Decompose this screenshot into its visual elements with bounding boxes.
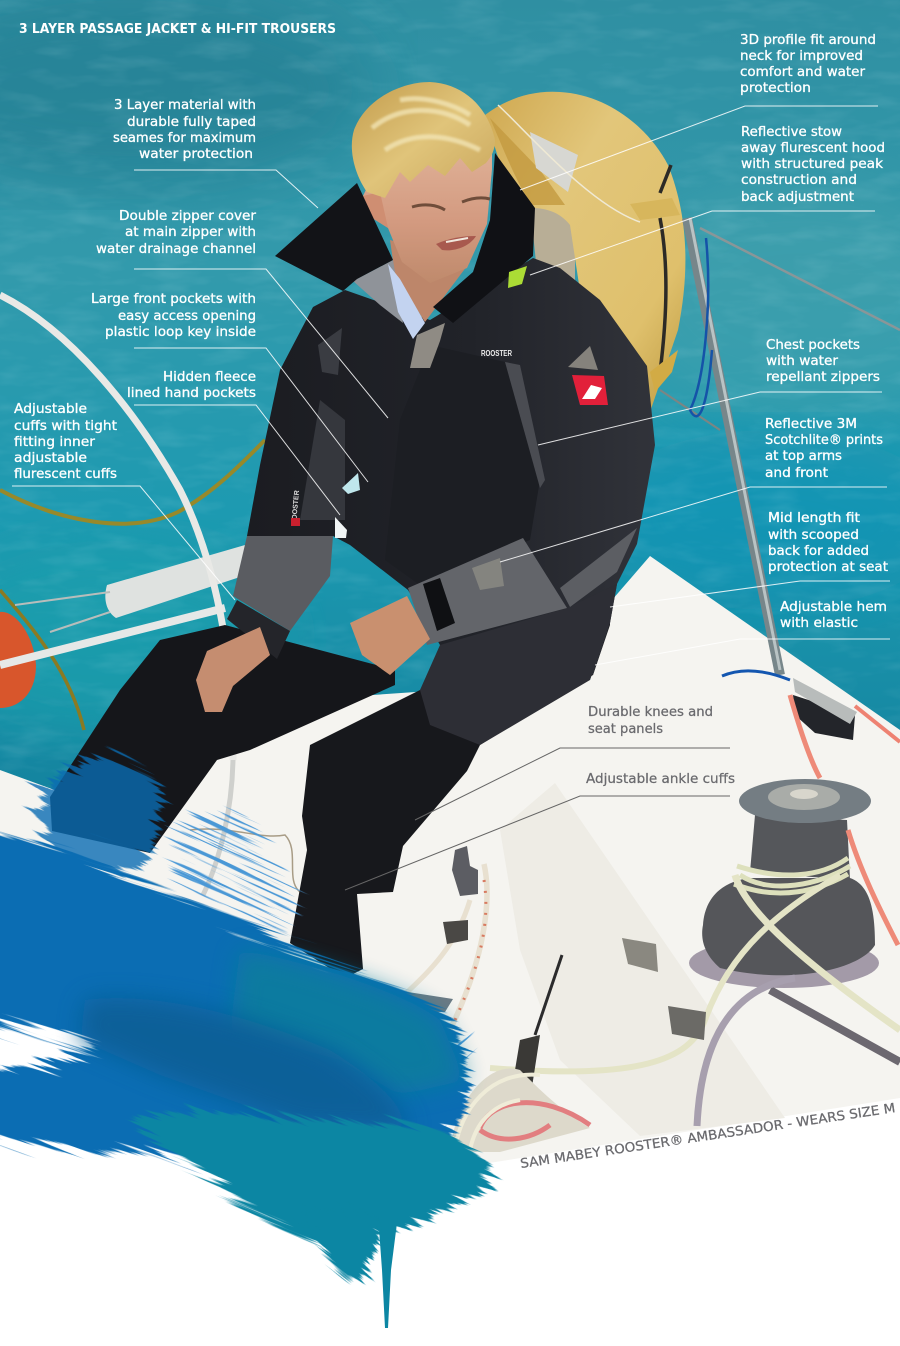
callout: chest pockets: with water [766,354,839,369]
callout: 3D profile fit: 3D profile fit around [740,33,876,48]
left sleeve grey panel [233,536,333,631]
pocket gaps [342,473,360,494]
callout: durable knees [415,705,730,820]
eyes and mouth [412,198,490,210]
callout: adjustable cuffs: adjustable [14,451,87,466]
callout: reflective stow hood: back adjustment [741,190,854,205]
callout: double zipper cover: at main zipper with [125,225,256,240]
person: Sam Mabey in jacket and trousers [50,82,655,978]
thigh and jacket hem panel [420,584,617,745]
blue streaks on right [318,970,544,1195]
face [363,130,492,283]
callout: adjustable cuffs [12,402,235,600]
callout: reflective stow hood: construction and [741,173,857,188]
callout: adjustable hem [595,600,890,665]
left trouser leg [50,625,395,853]
winch [490,695,900,1126]
callout: 3D profile fit: protection [740,81,811,96]
feathered lower streaks [246,1156,434,1344]
callout: reflective 3M prints: and front [765,466,828,481]
teal overlay mid right [230,950,465,1095]
callout: reflective 3M prints: Reflective 3M [765,417,857,432]
title: 3 LAYER PASSAGE JACKET & HI-FIT TROUSERS [19,22,336,37]
brand badge [572,375,608,405]
callout: large front pockets: easy access opening [118,309,256,324]
callout: large front pockets: plastic loop key inside [105,325,256,340]
cuffs [227,600,290,659]
chest logo: ROOSTER [481,349,512,358]
callout: 3D profile fit: neck for improved [740,49,863,64]
sleeve logo: ROOSTER [291,490,301,525]
stanchion and rigging [660,218,900,742]
callout: hidden fleece pockets: Hidden fleece [163,370,256,385]
callout: adjustable cuffs: fitting inner [14,435,96,450]
callout: 3 layer material: durable fully taped [127,115,256,130]
callout: hidden fleece pockets: lined hand pockets [127,386,256,401]
callout: adjustable cuffs: cuffs with tight [14,419,117,434]
deck shading [500,783,785,1136]
callout: mid length fit [610,511,890,607]
callout: 3D profile fit [520,33,878,190]
background: sea water [0,0,900,790]
neck [390,240,470,322]
deck fittings and ropes [360,846,706,1152]
callout: chest pockets [538,338,882,445]
callout: 3D profile fit: comfort and water [740,65,866,80]
callout: durable knees: seat panels [588,722,663,737]
callout: chest pockets: Chest pockets [766,338,860,353]
callout: adjustable hem: with elastic [780,616,858,631]
collar hood left [275,183,393,291]
callout: reflective 3M prints: Scotchlite® prints [765,433,883,448]
callout: adjustable cuffs: Adjustable [14,402,87,417]
caption: ambassador: SAM MABEY ROOSTER® AMBASSADOR - WEARS SIZE M [519,1101,896,1172]
callout: 3 layer material [113,98,318,208]
jacket body [247,258,655,675]
callout: durable knees: Durable knees and [588,705,713,720]
main blue stroke [0,669,563,1296]
light streaks on deck [103,746,357,1004]
callout: double zipper cover [96,209,388,418]
callout: reflective 3M prints [500,417,887,562]
callout: mid length fit: Mid length fit [768,511,860,526]
callout: reflective stow hood: Reflective stow [741,125,842,140]
right sleeve grey panels [408,538,567,645]
reflective patches [410,323,445,368]
callout: adjustable hem: Adjustable hem [780,600,887,615]
callout: reflective stow hood: with structured peak [741,157,883,172]
blue paint splash [0,669,563,1346]
callout: large front pockets: Large front pockets with [91,292,256,307]
callout: mid length fit: back for added [768,544,869,559]
callout: mid length fit: protection at seat [768,560,888,575]
white hoop, rails, rope and buoy at left [0,295,300,895]
callout: reflective stow hood: away flurescent hood [741,141,885,156]
right hand [350,596,430,675]
callout: reflective 3M prints: at top arms [765,449,842,464]
callout: double zipper cover: Double zipper cover [119,209,257,224]
right trouser leg and boot [290,600,610,978]
life ring [485,92,685,412]
callout: mid length fit: with scooped [768,528,859,543]
callout: double zipper cover: water drainage channel [96,242,256,257]
callout: chest pockets: repellant zippers [766,370,880,385]
teal lower stroke [61,973,554,1346]
callout: 3 layer material: 3 Layer material with [114,98,256,113]
left hand [196,627,270,712]
boat deck [0,556,900,1166]
blue over trouser leg [0,698,211,922]
callout: 3 layer material: water protection [139,147,253,162]
callout: hidden fleece pockets [127,370,340,515]
callout: adjustable ankle cuffs [345,772,735,890]
callout: adjustable ankle cuffs: Adjustable ankle cuffs [586,772,735,787]
callout: 3 layer material: seames for maximum [113,131,256,146]
callout: large front pockets [91,292,368,482]
blue strokes lower left [0,954,307,1261]
callout: reflective stow hood [530,125,885,275]
shirt collar and hood lining [353,260,403,323]
hair [352,82,495,198]
callout: adjustable cuffs: flurescent cuffs [14,467,117,482]
collar hood right [433,153,535,323]
paint drip [378,1215,398,1328]
dark centre of stroke [80,998,410,1130]
